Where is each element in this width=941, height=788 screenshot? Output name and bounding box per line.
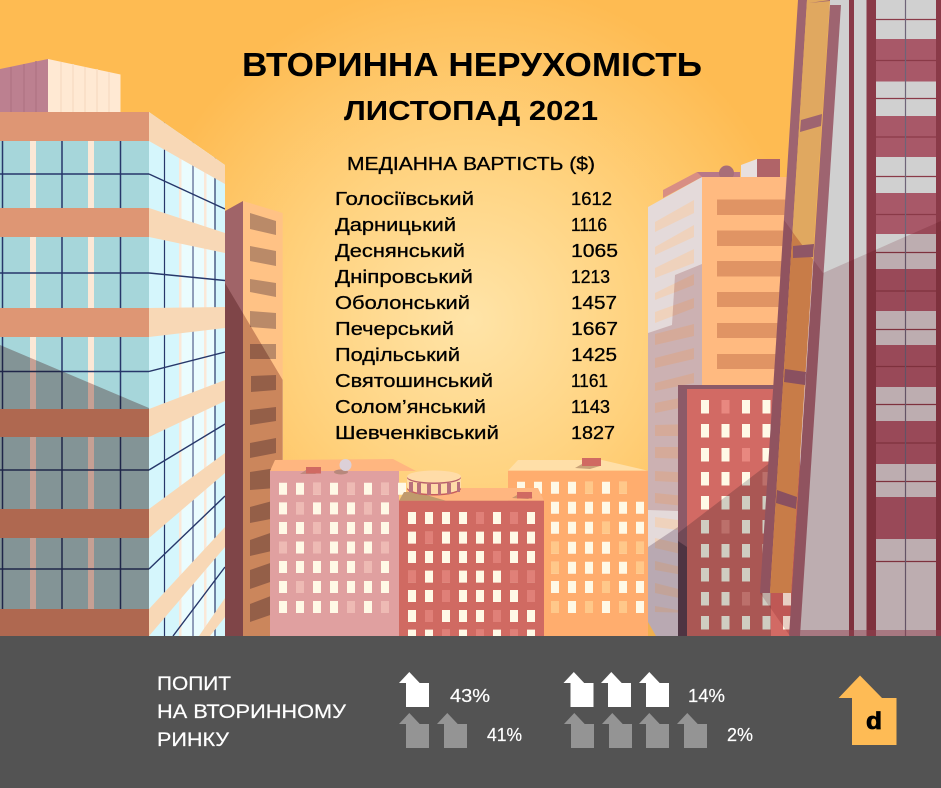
district price table: Печерський bbox=[335, 318, 454, 339]
footer label bbox=[157, 673, 347, 751]
district price table: 1425 bbox=[571, 344, 617, 365]
district price table: 1143 bbox=[571, 396, 610, 417]
district price table: 1612 bbox=[571, 188, 612, 209]
building: narrow tower bbox=[225, 201, 283, 636]
district price table: 1065 bbox=[571, 240, 618, 261]
building: red block bbox=[399, 470, 544, 642]
district price table bbox=[335, 188, 618, 443]
round rooftop pavilion bbox=[407, 470, 461, 496]
district price table: 1667 bbox=[571, 318, 618, 339]
percentages: 43% bbox=[450, 685, 490, 706]
footer panel bbox=[0, 636, 941, 788]
district price table: 1457 bbox=[571, 292, 617, 313]
percentages: 2% bbox=[727, 724, 753, 745]
building: right middle tower bbox=[648, 159, 792, 636]
district price table: Деснянський bbox=[335, 240, 465, 261]
building: right red block bbox=[678, 385, 800, 636]
district price table: Голосіївський bbox=[335, 188, 474, 209]
district price table: 1161 bbox=[571, 370, 608, 391]
footer label: РИНКУ bbox=[157, 729, 230, 751]
side face bbox=[149, 112, 225, 636]
logo bbox=[839, 676, 896, 745]
district price table: 1827 bbox=[571, 422, 615, 443]
district price table: Святошинський bbox=[335, 370, 493, 391]
table heading: МЕДІАННА ВАРТІСТЬ ($) bbox=[347, 154, 595, 174]
building: pink block bbox=[270, 459, 416, 636]
footer label: НА ВТОРИННОМУ bbox=[157, 701, 347, 723]
logo: d bbox=[866, 708, 882, 735]
title bbox=[242, 47, 702, 126]
icons: white houses bbox=[399, 672, 669, 707]
district price table: 1213 bbox=[571, 266, 610, 287]
building: orange block bbox=[508, 458, 648, 637]
district price table: 1116 bbox=[571, 214, 607, 235]
roof box bbox=[0, 59, 120, 112]
district price table: Оболонський bbox=[335, 292, 470, 313]
district price table: Подільський bbox=[335, 344, 460, 365]
district price table: Дніпровський bbox=[335, 266, 473, 287]
icons: gray houses bbox=[399, 713, 707, 748]
footer label: ПОПИТ bbox=[157, 673, 231, 695]
district price table: Солом’янський bbox=[335, 396, 486, 417]
district price table: Дарницький bbox=[335, 214, 456, 235]
percentages bbox=[450, 685, 753, 745]
percentages: 14% bbox=[688, 685, 725, 706]
percentages: 41% bbox=[487, 724, 522, 745]
building: left glass office bbox=[0, 59, 225, 636]
building: tall striped tower bbox=[800, 0, 941, 636]
district price table: Шевченківський bbox=[335, 422, 499, 443]
title: ВТОРИННА НЕРУХОМІСТЬ bbox=[242, 47, 702, 84]
title: ЛИСТОПАД 2021 bbox=[344, 95, 598, 126]
building: leaning tower frame bbox=[760, 0, 941, 636]
